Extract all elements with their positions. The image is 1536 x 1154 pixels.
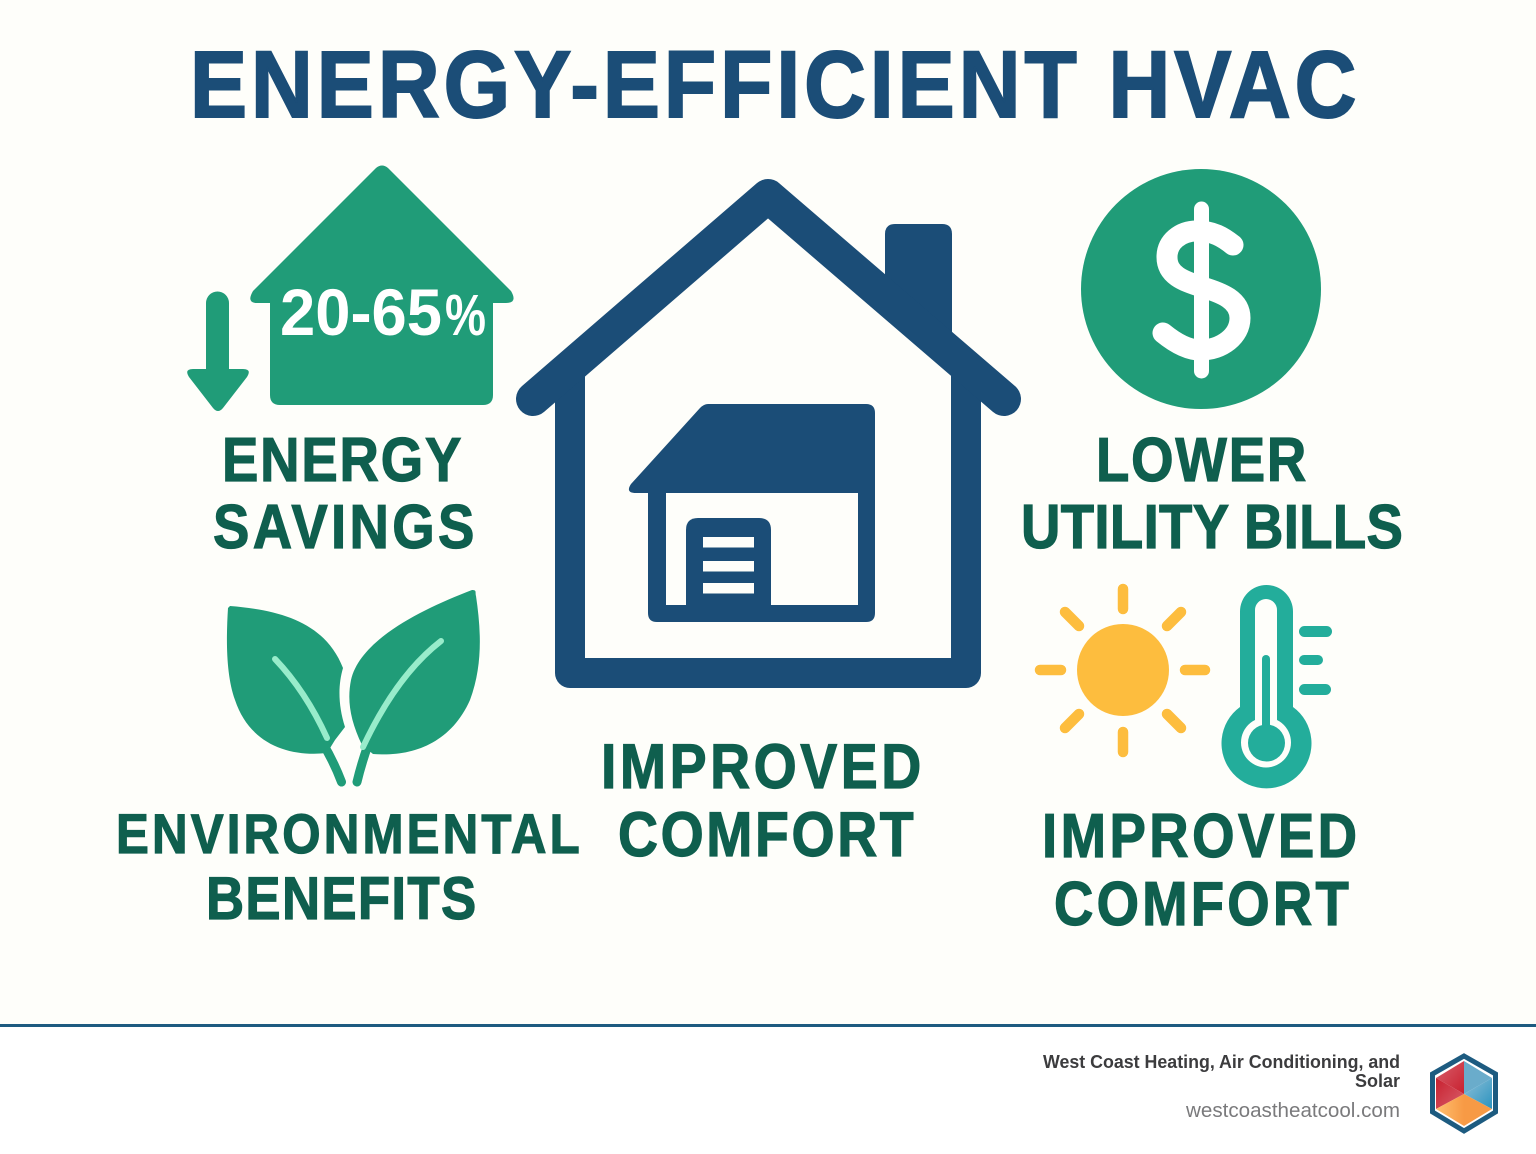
label: environmental benefits: ENVIRONMENTAL <box>116 803 580 866</box>
icon: green house with percentage: % <box>445 283 486 348</box>
panel: energy savings <box>187 166 514 562</box>
panel: central house <box>533 196 1004 870</box>
label: improved comfort centre <box>601 731 921 870</box>
icon: green house with percentage <box>250 166 514 405</box>
icon: thermometer <box>1221 585 1332 788</box>
icon: two leaves <box>227 590 480 782</box>
label: lower utility bills: UTILITY BILLS <box>1021 493 1403 562</box>
footer url: westcoastheatcool.com <box>1185 1100 1400 1122</box>
icon: green house with percentage: 20-65 <box>280 275 442 349</box>
label: lower utility bills: LOWER <box>1096 426 1306 495</box>
footer <box>0 1024 1536 1154</box>
label: energy savings: SAVINGS <box>213 493 474 562</box>
icon: large house outline <box>533 196 1004 673</box>
label: energy savings <box>213 426 474 562</box>
panel: improved comfort right <box>1040 585 1357 939</box>
label: environmental benefits: BENEFITS <box>206 865 476 932</box>
label: improved comfort centre: IMPROVED <box>601 731 921 802</box>
title: ENERGY-EFFICIENT HVAC <box>190 32 1356 138</box>
panel: lower utility bills <box>1021 169 1403 562</box>
icon: down arrow <box>187 292 249 411</box>
panel: environmental benefits <box>116 590 580 932</box>
logo: hexagon <box>1432 1056 1496 1131</box>
label: improved comfort centre: COMFORT <box>618 799 914 870</box>
label: energy savings: ENERGY <box>222 426 461 495</box>
icon: sun <box>1040 589 1205 752</box>
icon: garage <box>629 404 875 622</box>
icon: dollar coin <box>1081 169 1321 409</box>
label: improved comfort right <box>1042 802 1357 939</box>
label: improved comfort right: COMFORT <box>1054 870 1349 939</box>
label: environmental benefits <box>116 803 580 932</box>
footer company name: West Coast Heating, Air Conditioning, and <box>1043 1052 1400 1072</box>
label: lower utility bills <box>1021 426 1403 562</box>
label: improved comfort right: IMPROVED <box>1042 802 1357 871</box>
footer company name <box>1043 1052 1400 1091</box>
footer company name: Solar <box>1355 1071 1400 1091</box>
